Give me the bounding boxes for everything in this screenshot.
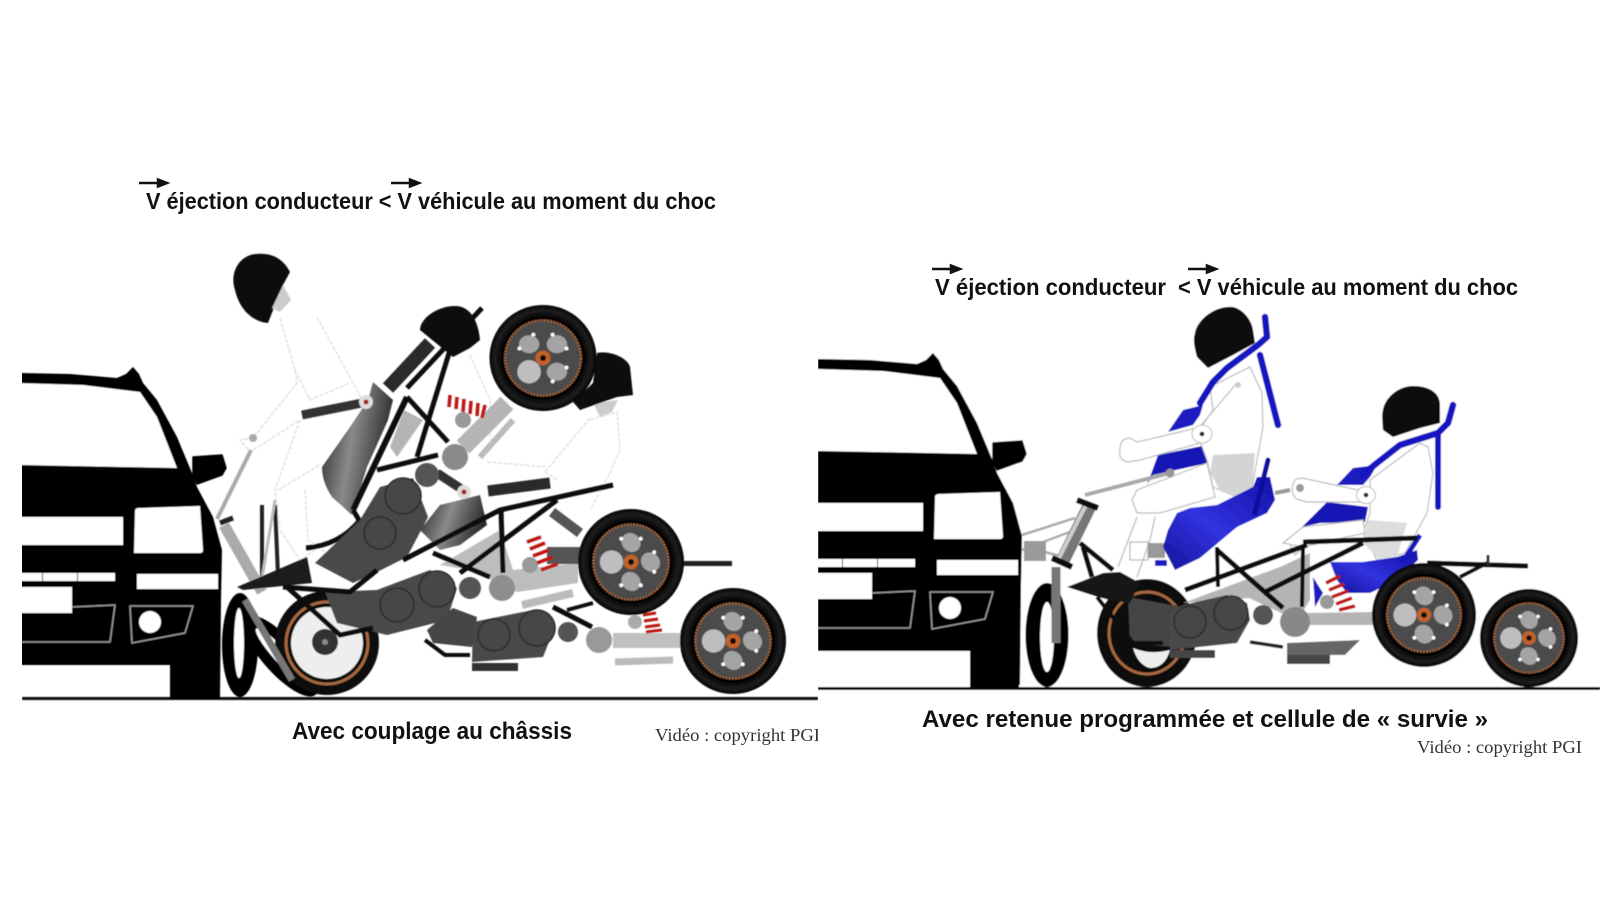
engine upper <box>315 463 439 583</box>
helmet A <box>1194 307 1255 368</box>
rear motorcycle wheel <box>1097 579 1197 687</box>
rear frame bar <box>680 561 732 566</box>
ground line <box>818 687 1600 690</box>
blue back B <box>1302 465 1377 527</box>
front wheel <box>1026 583 1068 687</box>
seat B <box>1313 405 1453 607</box>
handlebar tube <box>217 450 251 519</box>
heading right: < V véhicule au moment du choc <box>1178 274 1518 300</box>
lower frame tubes and bracket <box>237 485 613 655</box>
illustration: crash sequence with frame coupling <box>18 254 818 716</box>
caption left: Avec couplage au châssis <box>292 718 572 745</box>
car silhouette left <box>18 367 226 699</box>
engine right <box>1128 595 1273 658</box>
wheel 3 low <box>680 587 787 695</box>
blue back A <box>1147 405 1208 485</box>
fork <box>1052 500 1098 643</box>
wheel 1 top <box>490 305 596 411</box>
dummy A torso <box>1197 367 1263 497</box>
frame right <box>1067 538 1528 643</box>
helmet 3 <box>573 352 633 417</box>
panel background <box>818 300 1600 700</box>
red spring top <box>449 395 485 418</box>
mechanics right <box>1250 595 1360 664</box>
seat A <box>1155 317 1278 570</box>
red spring middle <box>527 537 558 570</box>
dummy B <box>1283 443 1433 560</box>
credit left: Vidéo : copyright PGI <box>655 725 820 745</box>
wheel 4 <box>1350 541 1498 689</box>
engine middle <box>325 570 481 635</box>
upper frame tubes <box>306 308 482 548</box>
panel: avec retenue programmée <box>818 266 1600 757</box>
crushed front wheel <box>254 616 317 698</box>
rear wheel assembly lower <box>586 613 681 662</box>
panel: avec couplage au châssis <box>18 180 820 745</box>
thigh A <box>1132 463 1215 513</box>
dummy A legs <box>1118 517 1155 577</box>
handlebar rod A <box>1085 468 1174 495</box>
ghost hand <box>249 434 257 442</box>
second seat <box>420 495 487 550</box>
ghost dummy 3 <box>470 355 620 510</box>
thick top tube <box>388 343 430 388</box>
swing arm <box>1183 553 1373 625</box>
rear swing arm middle <box>440 512 580 605</box>
helmet B <box>1382 386 1440 437</box>
second strap <box>437 473 463 490</box>
arm B <box>1275 478 1376 504</box>
arm A <box>1120 425 1212 462</box>
ghost dummy 1 <box>240 317 362 560</box>
top tube lower frame <box>488 483 550 491</box>
seat <box>322 382 393 515</box>
frame behind car <box>1022 518 1075 561</box>
car silhouette right <box>818 353 1026 688</box>
foot block A <box>1148 543 1165 558</box>
front wheel (thin) <box>222 593 258 697</box>
illustration: restrained occupants <box>818 300 1600 707</box>
red spring right <box>1326 576 1355 610</box>
front fork <box>220 500 292 680</box>
ground line <box>22 697 818 700</box>
helmet 1 <box>233 254 291 323</box>
wheel 5 <box>1460 569 1598 707</box>
wheel 2 middle <box>578 508 685 616</box>
heading right <box>932 266 1518 300</box>
helmet 2 <box>420 306 480 357</box>
engine lower <box>427 608 578 671</box>
credit right: Vidéo : copyright PGI <box>1417 737 1582 757</box>
heading right: V éjection conducteur <box>935 274 1166 300</box>
seat belt strap <box>302 403 362 415</box>
swing arm top <box>390 403 513 470</box>
rear motorcycle wheel <box>275 591 379 695</box>
caption right: Avec retenue programmée et cellule de « survie » <box>922 706 1488 733</box>
heading left: V éjection conducteur < V véhicule au moment du choc <box>146 188 716 214</box>
